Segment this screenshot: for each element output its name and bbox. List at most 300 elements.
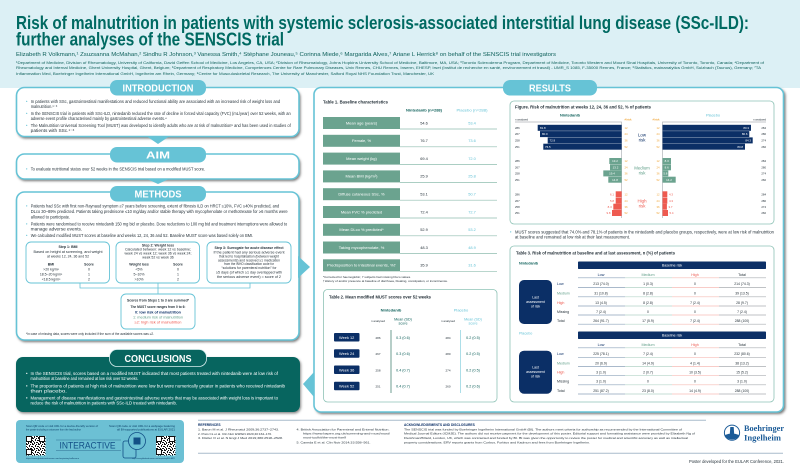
intro text bbox=[26, 99, 292, 133]
row: predisposition: 31.6 bbox=[468, 263, 476, 268]
methods text: We calculated modified MUST scores at baseline and weeks 12, 24, 36 and 52. Baseline MUST score was based solely on BMI. bbox=[31, 233, 253, 238]
step 2 box: >10% bbox=[134, 277, 144, 281]
risk labels: risk bbox=[639, 138, 646, 142]
row: female: 73.6 bbox=[468, 138, 476, 143]
heading: methods bbox=[110, 186, 206, 202]
placebo sub-table: 10 (3.5) bbox=[689, 370, 701, 374]
bars: low risk: 80.6 bbox=[742, 132, 748, 136]
intro text: adverse event profile characterised mainly by gastrointestinal adverse events.⁴ bbox=[31, 116, 167, 121]
acknowledgements and disclosures: FleishmanHillard, London, UK, which was contracted and funded by BI. BI was given the opportunity to review the poster for medical and scientific accuracy as well as intellectual bbox=[404, 436, 688, 440]
interactive captions: all BI-supported publications at EULAR 2021 bbox=[117, 428, 175, 432]
intro text: In the SENSCIS trial in patients with SSc-ILD, nintedanib reduced the rate of decline in forced vital capacity (FVC) (mL/year) over 52 weeks, with an bbox=[31, 111, 291, 116]
nintedanib sub-table: of risk bbox=[531, 304, 540, 308]
nintedanib sub-table: 13 (4.5) bbox=[595, 301, 607, 305]
table 2: mean modified MUST scores: Placebo bbox=[454, 307, 469, 312]
intro text: • bbox=[26, 99, 28, 104]
step 2 box: Calculated between: week 12 vs baseline; bbox=[125, 248, 191, 252]
acknowledgements and disclosures: property considerations. ERV reports grants from Corbus, Forbius and Kadmon and fees from Boehringer Ingelheim. bbox=[404, 440, 590, 444]
placebo sub-table: 38 (13.2) bbox=[735, 361, 749, 365]
bars: high risk: 3.7 bbox=[668, 205, 673, 209]
table 2: mean modified MUST scores: score bbox=[398, 322, 408, 326]
placebo sub-table: 2 (0.7) bbox=[643, 370, 653, 374]
step 1 box: BMI bbox=[48, 262, 54, 266]
arrow: aim to methods bbox=[147, 179, 169, 184]
placebo sub-table: 0 bbox=[647, 380, 649, 384]
n analysed and week columns: 280 bbox=[761, 165, 766, 169]
interactive captions: Scan QR code or visit URL for a webpage featuring bbox=[109, 424, 175, 428]
n analysed and week columns: 280 bbox=[761, 199, 766, 203]
n analysed and week columns: 52 bbox=[656, 178, 660, 182]
table 1 footnotes: †History of and/or presence at baseline of diarrhoea, bloating, constipation, or incontinence. bbox=[323, 279, 448, 283]
n analysed and week columns: 286 bbox=[515, 126, 520, 130]
table 2: mean modified MUST scores: n analysed bbox=[441, 319, 455, 323]
row: week 12 bbox=[334, 333, 480, 342]
step 1 box: >20 kg/m² bbox=[43, 267, 60, 271]
step 2 box: <5% bbox=[135, 267, 143, 271]
bars: low risk: 80.3 bbox=[743, 126, 749, 130]
n analysed and week columns: 274 bbox=[761, 205, 766, 209]
step 2 box: Weight loss bbox=[129, 262, 149, 266]
n analysed and week columns: 36 bbox=[624, 138, 628, 142]
figure: risk of malnutrition: n analysed bbox=[515, 117, 529, 121]
risk labels: Low bbox=[638, 132, 647, 138]
placebo sub-table: 0 bbox=[694, 380, 696, 384]
step 1 box: 0 bbox=[88, 267, 90, 271]
intro text: malnutrition.¹⁻³ bbox=[31, 104, 58, 109]
row: week 36: 274 bbox=[445, 368, 451, 372]
figure: risk of malnutrition: #/risk bbox=[624, 117, 632, 121]
nintedanib sub-table: Medium bbox=[641, 273, 655, 277]
score summary box bbox=[121, 294, 195, 329]
aim text: To evaluate nutritional status over 52 weeks in the SENSCIS trial based on a modified MUST score. bbox=[31, 166, 205, 172]
title bbox=[16, 12, 749, 50]
step 3 box: “solutions for parenteral nutrition” for bbox=[222, 266, 277, 270]
step 2 box: 0 bbox=[177, 267, 179, 271]
methods text: manage adverse events. bbox=[31, 226, 82, 231]
row: week 52: 251 bbox=[375, 385, 381, 389]
methods text: • bbox=[26, 221, 28, 226]
logo: Boehringer Ingelheim: Ingelheim bbox=[744, 432, 781, 442]
n analysed and week columns: 286 bbox=[515, 192, 520, 196]
title: further analyses of the SENSCIS trial bbox=[16, 28, 284, 50]
arrow: methods to results bbox=[298, 256, 310, 278]
affiliations: ¹Department of Medicine, Division of Rheumatology, University of California, David Geffen School of Medicine, Los Angeles, CA, USA; ²Division of Rheumatology, Johns Hopkins University School of Medicine, Baltimore, MA, USA; ³Toronto Scleroderma Program, Department of Medicine, Toronto Western and Mount Sinai Hospitals, University of Toronto, Toronto, Canada; ⁴Department of bbox=[16, 61, 765, 65]
step 1 box: Score bbox=[84, 262, 94, 266]
nintedanib sub-table: Total bbox=[738, 273, 746, 277]
n analysed and week columns: 36 bbox=[624, 205, 628, 209]
panel: conclusions bbox=[16, 357, 301, 414]
step 2 box bbox=[116, 242, 200, 283]
nintedanib sub-table: 0 bbox=[694, 310, 696, 314]
placebo sub-table: 251 (87.2) bbox=[593, 389, 609, 393]
step 3 box bbox=[207, 242, 291, 283]
step 2 box: 1 bbox=[177, 272, 179, 276]
acknowledgements and disclosures: ACKNOWLEDGEMENTS AND DISCLOSURES bbox=[404, 423, 476, 427]
table 2: mean modified MUST scores: Nintedanib bbox=[381, 307, 402, 312]
heading: aim: AIM bbox=[146, 150, 170, 162]
placebo sub-table: Baseline risk bbox=[662, 334, 682, 338]
step 1 box: 18.5–20 kg/m² bbox=[40, 272, 63, 276]
row: week 12: 286 bbox=[375, 336, 381, 340]
row: mean BMI bbox=[323, 170, 497, 182]
conclusions text: In the SENSCIS trial, scores based on a modified MUST indicated that most patients treated with nintedanib were at low risk of bbox=[30, 371, 279, 376]
row: mean weight: 72.0 bbox=[468, 156, 477, 161]
placebo sub-table: 0 bbox=[694, 352, 696, 356]
bars: high risk: 9.8 bbox=[606, 211, 611, 215]
interactive captions: https://www.globalmedcomms.com/respiratory/volkmann bbox=[26, 457, 79, 460]
figure: risk of malnutrition: n analysed bbox=[753, 117, 767, 121]
row: week 36: Week 36 bbox=[339, 367, 354, 372]
placebo sub-table: 3 (1.0) bbox=[596, 380, 606, 384]
heading: conclusions bbox=[110, 350, 206, 366]
row: week 52: 0.2 (0.6) bbox=[466, 385, 480, 389]
placebo sub-table: Low bbox=[598, 343, 605, 347]
n analysed and week columns: 251 bbox=[515, 211, 520, 215]
nintedanib sub-table: 28 (9.7) bbox=[736, 301, 748, 305]
bars: medium risk: 8.3 bbox=[665, 159, 669, 163]
n analysed and week columns: 284 bbox=[761, 192, 766, 196]
nintedanib sub-table: assessment bbox=[526, 300, 545, 304]
nintedanib sub-table: 214 (74.3) bbox=[734, 282, 750, 286]
interactive label: INTERACTIVE bbox=[60, 440, 116, 452]
placebo sub-table: 232 (80.6) bbox=[734, 352, 750, 356]
placebo sub-table: 14 (4.9) bbox=[642, 361, 654, 365]
bars: high risk bbox=[606, 191, 674, 216]
row: week 36: 258 bbox=[375, 368, 381, 372]
placebo sub-table: 14 (4.9) bbox=[689, 389, 701, 393]
nintedanib sub-table: 0 bbox=[647, 310, 649, 314]
n analysed and week columns: 267 bbox=[515, 132, 520, 136]
row: mean weight bbox=[323, 153, 497, 165]
connector lines bbox=[80, 283, 250, 294]
nintedanib sub-table: 0 bbox=[694, 282, 696, 286]
bars: high risk: 4.3 bbox=[669, 192, 673, 196]
acknowledgements and disclosures: Medical Journal Editors (ICMJE). The authors did not receive payment for the development of this poster. Editorial support and formatting assistance were provided by Elizabeth Ng of bbox=[404, 432, 695, 436]
row: week 24 bbox=[334, 349, 480, 358]
placebo sub-table: 3 (1.0) bbox=[737, 380, 747, 384]
n analysed and week columns: 258 bbox=[515, 205, 520, 209]
row: diffuse cutaneous: Diffuse cutaneous SSc, % bbox=[338, 192, 385, 196]
step 2 box: Score bbox=[173, 262, 183, 266]
placebo sub-table: Medium bbox=[641, 343, 655, 347]
methods text: Patients had SSc with first non-Raynaud symptom ≤7 years before screening, extent of fibrosis ILD on HRCT ≥10%, FVC ≥40% predicted, and bbox=[31, 204, 280, 209]
placebo sub-table: Total bbox=[557, 389, 565, 393]
nintedanib sub-table: 39 (13.5) bbox=[735, 292, 749, 296]
row: mean BMI: 25.8 bbox=[468, 174, 476, 179]
nintedanib sub-table: 7 (2.4) bbox=[690, 319, 700, 323]
n analysed and week columns: 284 bbox=[761, 159, 766, 163]
row: mean FVC: 72.4 bbox=[420, 209, 429, 214]
heading: results: RESULTS bbox=[529, 82, 571, 94]
n analysed and week columns: 36 bbox=[656, 172, 660, 176]
n analysed and week columns: 24 bbox=[624, 199, 628, 203]
nintedanib sub-table: 213 (74.0) bbox=[593, 282, 609, 286]
references: REFERENCES bbox=[198, 423, 221, 427]
conclusions text: • bbox=[26, 396, 28, 400]
score summary box: ≥2: high risk of malnutrition bbox=[134, 321, 182, 325]
panel: interactive bbox=[16, 420, 184, 463]
methods text: allowed to participate. bbox=[31, 214, 70, 220]
row: mean weight: 69.4 bbox=[420, 156, 429, 161]
n analysed and week columns: 52 bbox=[624, 145, 628, 149]
placebo sub-table bbox=[519, 332, 766, 394]
step 1 box bbox=[26, 242, 110, 283]
references: 4. British Association for Parenteral and Enteral Nutrition. bbox=[296, 427, 390, 431]
row: week 12: 284 bbox=[445, 336, 451, 340]
heading: conclusions: CONCLUSIONS bbox=[124, 353, 192, 365]
risk labels: risk bbox=[639, 204, 646, 208]
placebo sub-table: High bbox=[557, 370, 564, 374]
nintedanib sub-table: Baseline risk bbox=[662, 264, 682, 268]
bars: medium risk: 14.8 bbox=[612, 178, 618, 182]
bars: medium risk: 13.2 bbox=[613, 165, 619, 169]
score summary box: Scores from Steps 1 to 3 are summed* bbox=[127, 299, 190, 303]
bars: low risk: 80.0 bbox=[542, 132, 548, 136]
table 2: mean modified MUST scores: n analysed bbox=[371, 319, 385, 323]
n analysed and week columns: 251 bbox=[515, 178, 520, 182]
placebo sub-table: 288 (100) bbox=[735, 389, 749, 393]
n analysed and week columns: 274 bbox=[761, 138, 766, 142]
row: week 12: 0.2 (0.5) bbox=[466, 336, 480, 340]
row: mean DLco: Mean DLco % predicted* bbox=[339, 227, 384, 232]
n analysed and week columns: 52 bbox=[656, 145, 660, 149]
nintedanib sub-table: 17 (5.9) bbox=[642, 319, 654, 323]
icon: device with poster bbox=[123, 432, 146, 458]
poster credit: Poster developed for the EULAR Conference, 2021. bbox=[689, 459, 784, 464]
n analysed and week columns: 260 bbox=[761, 211, 766, 215]
placebo sub-table: 225 (78.1) bbox=[593, 352, 609, 356]
row: week 24: 0.3 (0.6) bbox=[396, 352, 410, 356]
references: https://www.bapen.org.uk/screening-and-must/must/ bbox=[303, 432, 390, 436]
affiliations: Rheumatology and Internal Medicine, Ghent University Hospital, Ghent, Belgium; ⁵Department of Respiratory Medicine, Competences Centre for Rare Pulmonary Diseases, Univ Rennes, CHU Rennes, Inserm, EHESP, Irset (Institut de recherche en santé, environnement et travail) - UMR_S 1085, F-35000 Rennes, France; ⁶Statistics, mainanalytics GmbH, Sulzbach (Taunus), Germany; ⁷TA bbox=[16, 66, 762, 70]
nintedanib sub-table: Last bbox=[532, 296, 539, 300]
row: week 24: 0.2 (0.5) bbox=[466, 352, 480, 356]
row: mean age: 53.4 bbox=[468, 120, 477, 125]
nintedanib sub-table: Nintedanib bbox=[519, 262, 539, 266]
n analysed and week columns: 12 bbox=[624, 192, 628, 196]
logo: Boehringer Ingelheim: Boehringer bbox=[744, 423, 784, 433]
step 3 box: ≥5 days (of which ≥1 day overlapped with bbox=[216, 270, 282, 274]
row: week 52 bbox=[334, 382, 480, 390]
methods text: • bbox=[26, 233, 28, 238]
placebo sub-table: 3 (1.0) bbox=[596, 370, 606, 374]
table 1: baseline characteristics bbox=[323, 100, 497, 283]
row: mean weight: Mean weight (kg) bbox=[346, 156, 378, 161]
figure: risk of malnutrition: #/risk bbox=[652, 117, 660, 121]
methods text bbox=[26, 204, 288, 238]
nintedanib sub-table: High bbox=[691, 273, 699, 277]
row: week 24: 267 bbox=[375, 352, 381, 356]
nintedanib sub-table: Total bbox=[557, 319, 565, 323]
nintedanib sub-table: Low bbox=[557, 282, 564, 286]
table 2: mean modified MUST scores: Mean (SD) bbox=[464, 318, 482, 322]
acknowledgements and disclosures: The SENSCIS trial was funded by Boehringer Ingelheim International GmbH (BI). The authors meet criteria for authorship as recommended by the International Committee of bbox=[404, 427, 682, 431]
panel: results bbox=[314, 88, 786, 414]
row: week 36 bbox=[334, 366, 480, 374]
placebo sub-table: of risk bbox=[531, 374, 540, 378]
arrow: intro to aim bbox=[147, 136, 169, 144]
placebo sub-table: Last bbox=[532, 366, 539, 370]
QR code: left bbox=[26, 436, 46, 456]
panel: aim: • bbox=[26, 166, 28, 172]
n analysed and week columns: 12 bbox=[624, 159, 628, 163]
n analysed and week columns: 12 bbox=[656, 159, 660, 163]
figure: risk of malnutrition: Placebo bbox=[706, 112, 720, 117]
row: predisposition: 35.9 bbox=[420, 263, 428, 268]
nintedanib sub-table bbox=[519, 262, 766, 324]
conclusions text bbox=[26, 371, 286, 406]
n analysed and week columns: 280 bbox=[761, 132, 766, 136]
step 2 box: Step 2: Weight loss bbox=[142, 243, 174, 247]
table 1 footnotes: *Corrected for haemoglobin; 7 subjects had missing DLco values. bbox=[323, 275, 411, 279]
figure: risk of malnutrition: Figure. Risk of malnutrition at weeks 12, 24, 36 and 52, % of patients bbox=[515, 105, 652, 110]
table 1 footnotes bbox=[323, 275, 448, 283]
n analysed and week columns: 36 bbox=[656, 205, 660, 209]
conclusions text: Management of disease manifestations and gastrointestinal adverse events that may be associated with weight loss is important to bbox=[30, 396, 279, 400]
row: mean DLco bbox=[323, 224, 497, 236]
n analysed and week columns: 24 bbox=[656, 199, 660, 203]
table 1: baseline characteristics: Nintedanib (n=288) bbox=[406, 108, 443, 112]
row: week 52: 260 bbox=[445, 385, 451, 389]
row: diffuse cutaneous: 53.1 bbox=[420, 192, 428, 196]
nintedanib sub-table: 8 (2.8) bbox=[643, 292, 653, 296]
affiliations: Inflammation Med, Boehringer Ingelheim International GmbH, Ingelheim am Rhein, Germany; ⁸Centre for Musculoskeletal Research, The University of Manchester, Salford Royal NHS Foundation Trust, Manchester, UK bbox=[16, 72, 435, 76]
step 2 box: 2 bbox=[177, 277, 179, 281]
bars: medium risk: 19.4 bbox=[609, 172, 615, 176]
step 3 box: that led to hospitalisation (between weight bbox=[219, 254, 279, 258]
n analysed and week columns: 12 bbox=[656, 192, 660, 196]
step 3 box: Step 3: Surrogate for acute disease effect bbox=[214, 246, 284, 250]
table 1: baseline characteristics: Table 1. Baseline characteristics bbox=[323, 100, 389, 104]
placebo sub-table: High bbox=[691, 343, 699, 347]
heading: methods: METHODS bbox=[134, 189, 182, 201]
figure finding text: at baseline and remained at low risk at their last measurement. bbox=[515, 234, 630, 240]
risk labels bbox=[634, 132, 650, 208]
row: mean FVC: 72.7 bbox=[468, 209, 476, 214]
bars: low risk: 81.8 bbox=[540, 126, 546, 130]
nintedanib sub-table: 7 (2.4) bbox=[596, 310, 606, 314]
bars: low risk: 76.5 bbox=[545, 145, 551, 149]
affiliations bbox=[16, 61, 765, 76]
heading: results bbox=[503, 80, 597, 96]
step 3 box: assessments) and received ≥1 medication bbox=[218, 258, 280, 262]
table 2: mean modified MUST scores: Table 2. Mean modified MUST scores over 52 weeks bbox=[329, 294, 432, 299]
nintedanib sub-table: 0 bbox=[694, 292, 696, 296]
methods text: Patients were randomised to receive nintedanib 150 mg bid or placebo. Dose reductions to 100 mg bid and treatment interruptions were allowed to bbox=[31, 221, 288, 226]
n analysed and week columns: 12 bbox=[624, 126, 628, 130]
bars: medium risk: 13.2 bbox=[612, 159, 618, 163]
placebo sub-table: 23 (8.0) bbox=[642, 389, 654, 393]
bars: low risk: 80.8 bbox=[737, 145, 743, 149]
nintedanib sub-table: 288 (100) bbox=[735, 319, 749, 323]
risk labels: Medium bbox=[634, 166, 650, 170]
figure finding text: MUST scores suggested that 74.0% and 78.1% of patients in the nintedanib and placebo groups, respectively, were at low risk of malnutrition bbox=[515, 230, 775, 234]
panel: methods bbox=[16, 192, 300, 342]
row: week 12: 0.3 (0.6) bbox=[396, 336, 410, 340]
row: mean age: 54.6 bbox=[420, 120, 428, 125]
score summary box: The MUST score ranges from 0 to 6: bbox=[130, 305, 186, 309]
step 2 box: week 52 vs week 36 bbox=[142, 256, 174, 260]
row: diffuse cutaneous bbox=[323, 188, 497, 200]
placebo sub-table: assessment bbox=[526, 370, 545, 374]
step 3 box: from the WHO classification code for bbox=[224, 262, 275, 266]
n analysed and week columns: 36 bbox=[624, 172, 628, 176]
step 2 box: week 24 vs week 12; week 36 vs week 24; bbox=[124, 252, 192, 256]
authors: Elizabeth R Volkmann,¹ Zsuzsanna McMahan,² Sindhu R Johnson,³ Vanessa Smith,⁴ Stéphane Jouneau,⁵ Corinna Miede,⁶ Margarida Alves,⁷ Ariane L Herrick⁸ on behalf of the SENSCIS trial investigators bbox=[16, 52, 556, 58]
acknowledgements and disclosures bbox=[404, 423, 695, 444]
interactive captions: the poster including a voiceover from the lead author bbox=[26, 428, 81, 432]
table 2: mean modified MUST scores: score bbox=[468, 322, 478, 326]
placebo sub-table: 15 (5.2) bbox=[736, 370, 748, 374]
row: mycophenolate bbox=[323, 242, 497, 254]
table 3: risk at baseline and last assessment bbox=[510, 246, 774, 402]
interactive captions: https://www.globalmedcomms.com/respiratory/EULAR21 bbox=[132, 457, 176, 460]
bars: high risk: 5.8 bbox=[610, 199, 614, 203]
row: mean BMI: 25.9 bbox=[420, 174, 428, 179]
conclusions text: • bbox=[26, 371, 28, 376]
row: week 52: Week 52 bbox=[339, 384, 354, 389]
n analysed and week columns: 24 bbox=[624, 132, 628, 136]
placebo sub-table: 7 (2.4) bbox=[643, 352, 653, 356]
bars: low risk: 72.9 bbox=[550, 138, 556, 142]
placebo sub-table: 4 (1.4) bbox=[690, 361, 700, 365]
row: week 36: 0.4 (0.7) bbox=[396, 368, 410, 372]
step 3 box: the serious adverse event) = score of 2 bbox=[217, 275, 281, 279]
bars: low risk: 84.3 bbox=[745, 138, 751, 142]
nintedanib sub-table: Low bbox=[598, 273, 605, 277]
nintedanib sub-table: 7 (2.4) bbox=[737, 310, 747, 314]
row: female: Female, % bbox=[352, 138, 371, 143]
n analysed and week columns: 52 bbox=[624, 211, 628, 215]
references: 2. Preis CL et al. Clin Nutr ESPEN 2020;40:164–170. bbox=[198, 432, 272, 436]
QR code: right bbox=[156, 436, 176, 456]
step 1 box: 1 bbox=[88, 272, 90, 276]
row: mean age bbox=[323, 117, 497, 129]
row: mean age: Mean age (years) bbox=[346, 120, 378, 125]
bars: medium risk bbox=[603, 158, 676, 183]
step 1 box: <18.5 kg/m² bbox=[42, 277, 61, 281]
bars: high risk: 4.3 bbox=[669, 199, 673, 203]
row: mycophenolate: Taking mycophenolate, % bbox=[339, 245, 385, 250]
methods text: DLco 30–89% predicted. Patients taking prednisone ≤10 mg/day and/or stable therapy with mycophenolate or methotrexate for ≥6 months were bbox=[31, 209, 288, 214]
intro text: patients with SSc.¹⁻³ bbox=[31, 128, 75, 133]
n analysed and week columns bbox=[515, 126, 766, 215]
table 3: risk at baseline and last assessment: Table 3. Risk of malnutrition at baseline and at last assessment, n (%) of patients bbox=[516, 250, 676, 256]
nintedanib sub-table: Missing bbox=[557, 310, 569, 314]
intro text: The Malnutrition Universal Screening Tool (MUST) was developed to identify adults who are at risk of malnutrition⁵ and has been used in studies of bbox=[31, 123, 292, 128]
intro text: In patients with SSc, gastrointestinal manifestations and reduced functional ability are associated with an increased risk of weight loss and bbox=[31, 99, 281, 104]
row: diffuse cutaneous: 50.7 bbox=[468, 192, 476, 196]
row: week 24: 280 bbox=[445, 352, 451, 356]
nintedanib sub-table: 8 (2.8) bbox=[643, 301, 653, 305]
heading: introduction: INTRODUCTION bbox=[122, 82, 194, 94]
figure finding text bbox=[510, 230, 775, 240]
bars: medium risk: 5.8 bbox=[663, 172, 668, 176]
bars: high risk: 6.1 bbox=[610, 192, 614, 196]
heading: introduction bbox=[110, 80, 206, 96]
row: predisposition: Predisposition to intestinal events, %† bbox=[327, 263, 396, 268]
n analysed and week columns: 24 bbox=[656, 165, 660, 169]
conclusions text: reduce the risk of malnutrition in patients with SSc-ILD treated with nintedanib. bbox=[30, 401, 177, 406]
figure: risk of malnutrition: Nintedanib bbox=[560, 112, 581, 117]
nintedanib sub-table: 1 (0.3) bbox=[643, 282, 653, 286]
placebo sub-table: 20 (6.9) bbox=[595, 361, 607, 365]
step 2 box: 5–10% bbox=[134, 272, 144, 276]
risk labels: risk bbox=[639, 170, 646, 176]
row: mycophenolate: 48.3 bbox=[420, 245, 428, 250]
score summary box: 0: low risk of malnutrition bbox=[135, 310, 181, 314]
panel: introduction bbox=[16, 88, 300, 138]
